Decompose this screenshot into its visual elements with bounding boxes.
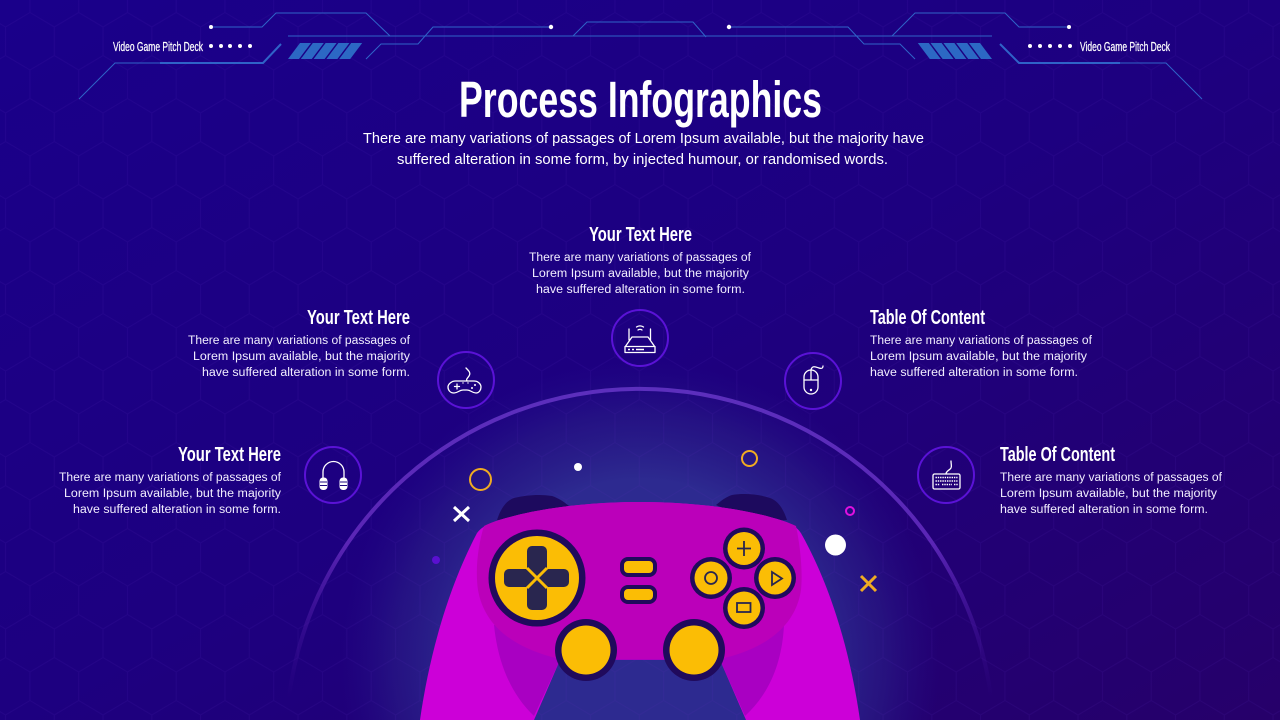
action buttons [690,528,796,629]
text block: upper left: have suffered alteration in some form. [202,367,410,379]
text block: lower right: have suffered alteration in some form. [1000,504,1208,516]
icon: mouse [785,353,841,409]
header label right [1028,39,1170,54]
subtitle: There are many variations of passages of Lorem Ipsum available, but the majority have [363,131,924,147]
text block: lower right [1000,444,1223,516]
icon: router [612,310,668,366]
text block: upper right: Table Of Content [870,307,985,329]
d-pad [488,530,586,626]
icon: headphones [305,447,361,503]
game controller [420,494,860,720]
text block: upper left [188,307,411,379]
text block: upper right: Lorem Ipsum available, but the majority [870,351,1087,363]
text block: upper right [870,307,1093,379]
controller shadow [494,625,784,716]
text block: lower left: There are many variations of passages of [59,472,282,484]
header label left: Video Game Pitch Deck [113,39,203,54]
text block: top centre: Lorem Ipsum available, but the majority [532,268,749,280]
text block: lower left: Your Text Here [178,444,281,466]
title: Process Infographics [459,71,822,128]
central glow [280,340,1000,720]
text block: top centre [529,224,752,296]
icon: gamepad [438,352,494,408]
text block: lower right: Lorem Ipsum available, but the majority [1000,488,1217,500]
subtitle: suffered alteration in some form, by injected humour, or randomised words. [397,152,888,168]
text block: lower left [59,444,282,516]
text block: lower right: Table Of Content [1000,444,1115,466]
text block: lower right: There are many variations of passages of [1000,472,1223,484]
text block: upper right: have suffered alteration in some form. [870,367,1078,379]
menu buttons [622,559,655,602]
text block: top centre: Your Text Here [589,224,692,246]
text block: upper left: There are many variations of passages of [188,335,411,347]
subtitle [363,131,924,168]
decorative shapes [432,451,876,591]
controller face [477,502,802,659]
analog sticks [555,619,725,681]
dome arc [289,389,991,700]
icon: keyboard [918,447,974,503]
header label right: Video Game Pitch Deck [1080,39,1170,54]
text block: lower left: Lorem Ipsum available, but the majority [64,488,281,500]
text block: top centre: have suffered alteration in some form. [536,284,745,296]
controller grips [420,502,860,720]
header circuit lines [79,13,1202,99]
text block: upper left: Your Text Here [307,307,410,329]
text block: upper right: There are many variations of passages of [870,335,1093,347]
text block: lower left: have suffered alteration in some form. [73,504,281,516]
controller bumpers [497,494,787,522]
text block: top centre: There are many variations of passages of [529,252,752,264]
text block: upper left: Lorem Ipsum available, but the majority [193,351,410,363]
